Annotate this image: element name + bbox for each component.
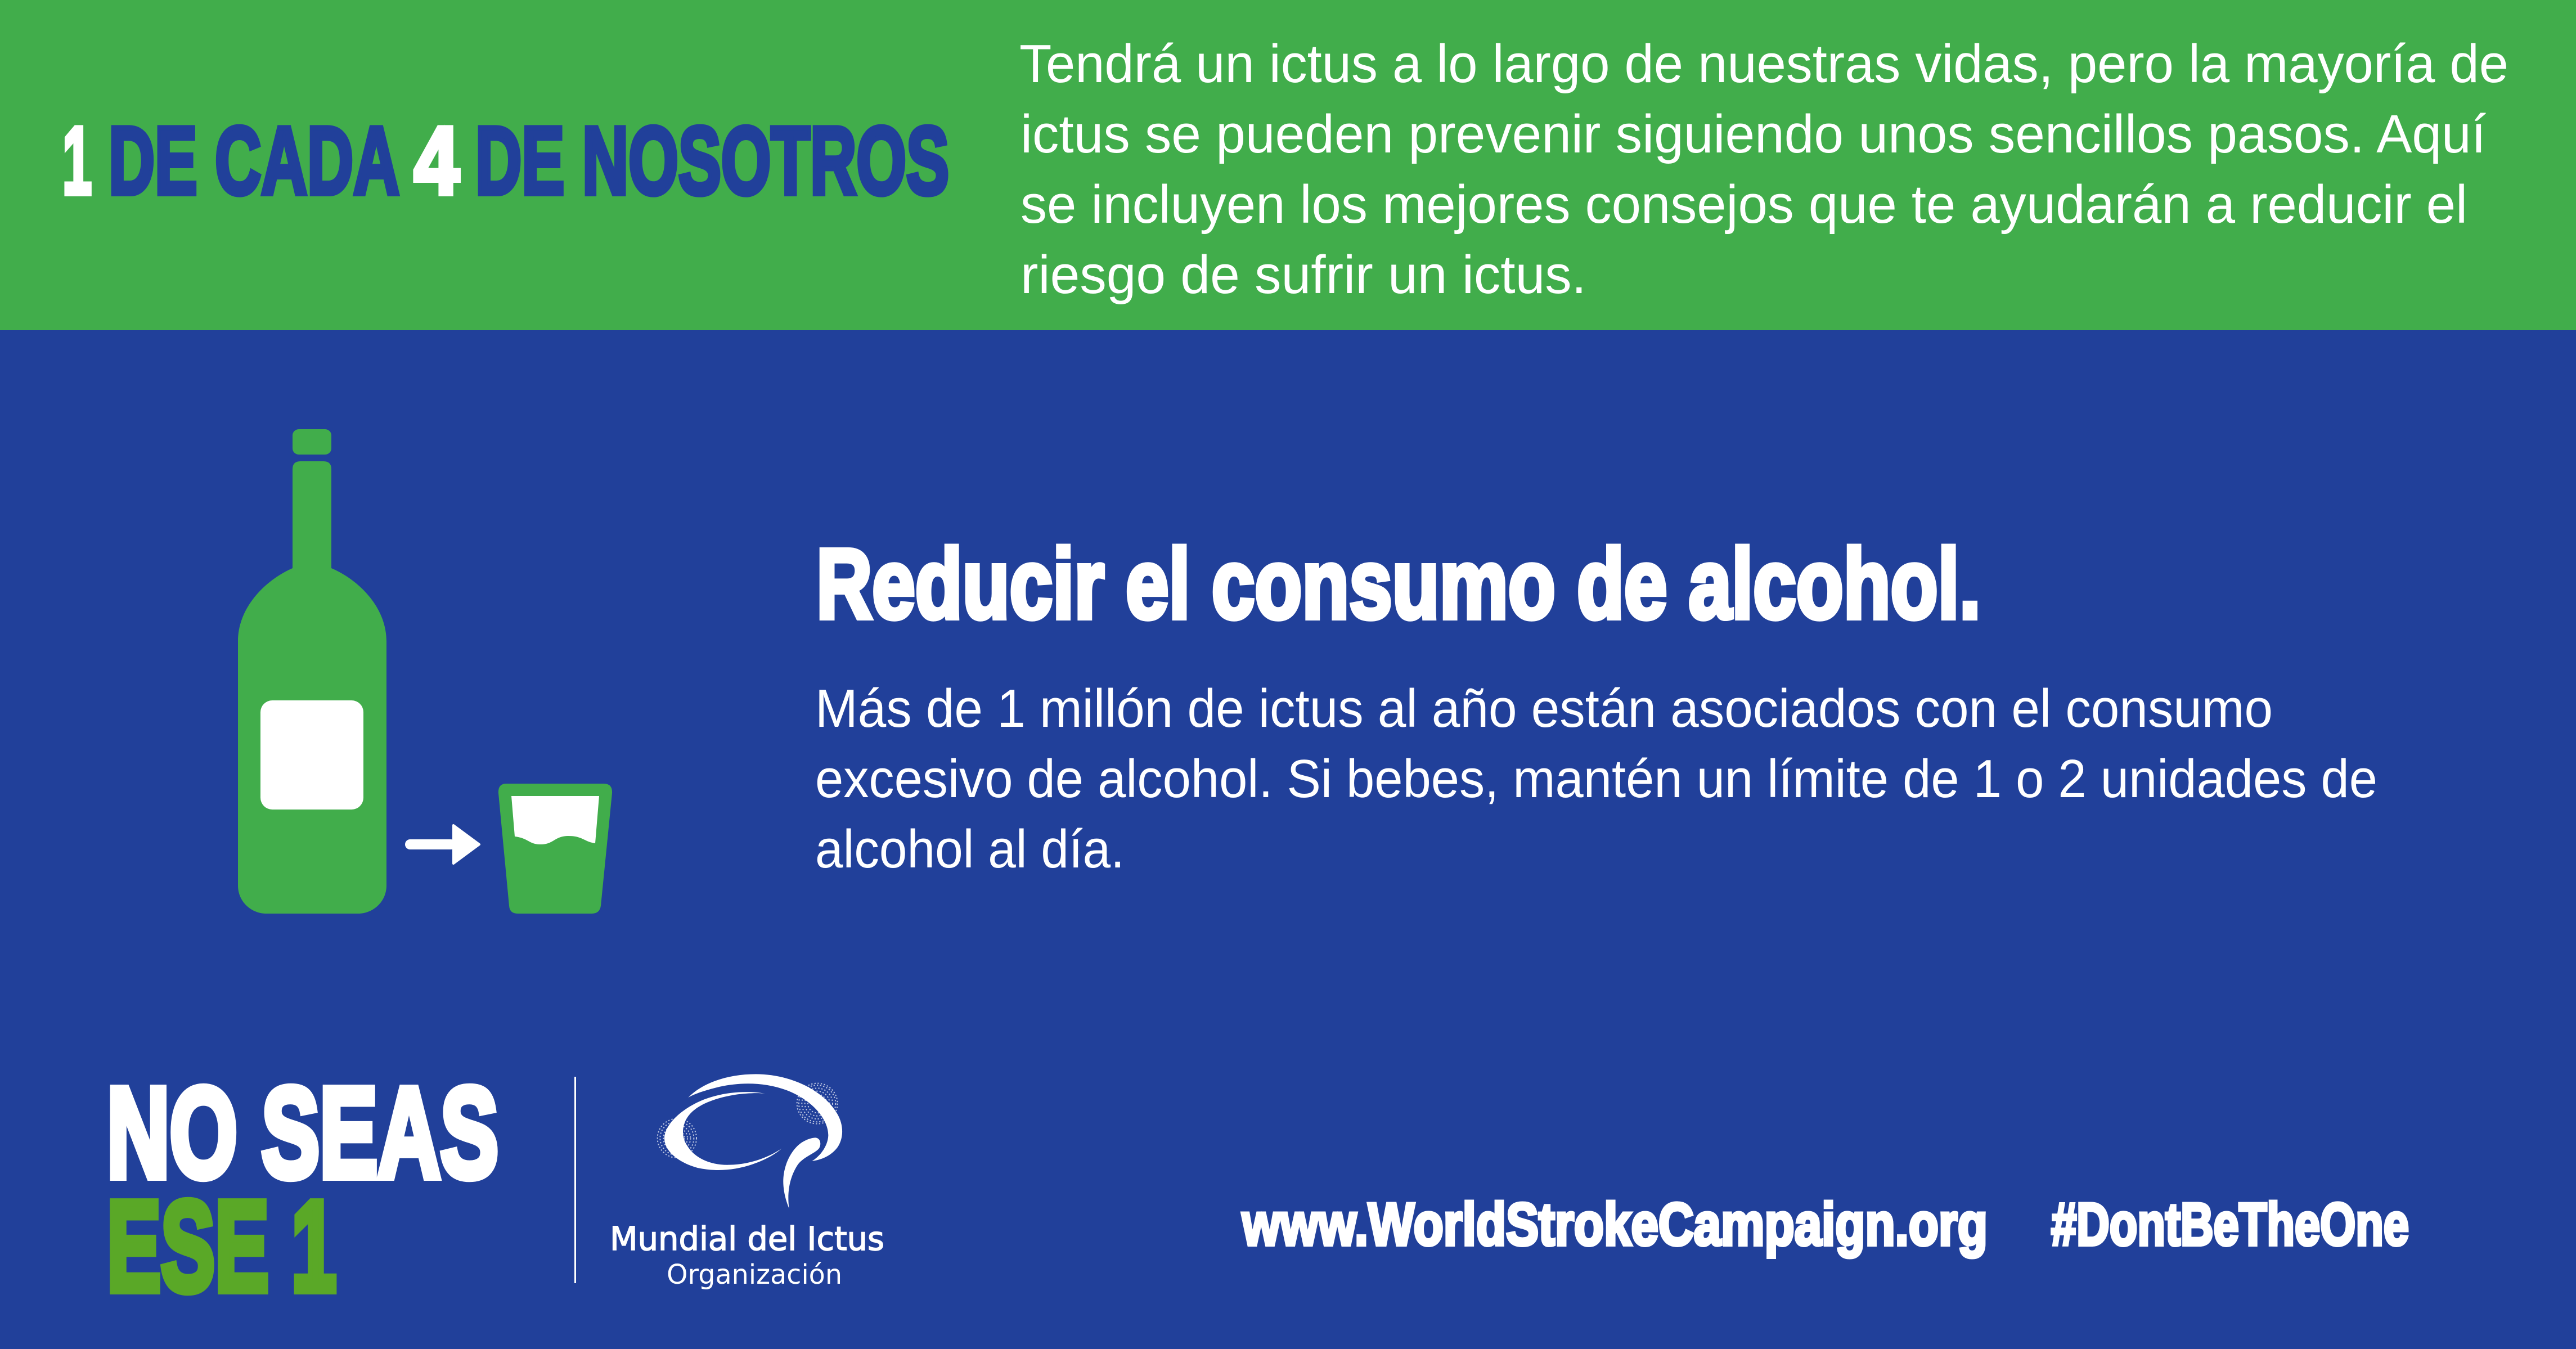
divider line [574,1077,576,1283]
hashtag: #DontBeTheOne [2051,1190,2409,1258]
icon: wine bottle [238,429,386,914]
header title: 1 de cada 4 de nosotros: 1 [62,107,92,215]
body paragraph [815,678,2377,879]
logo text: Organización [667,1259,842,1290]
header intro paragraph [1019,34,2508,305]
body paragraph: excesivo de alcohol. Si bebes, mantén un límite de 1 o 2 unidades de [815,749,2377,809]
header intro paragraph: ictus se pueden prevenir siguiendo unos sencillos pasos. Aquí [1020,104,2486,164]
logo text [610,1220,884,1290]
body paragraph: Más de 1 millón de ictus al año están asociados con el consumo [815,678,2273,739]
arrow: bottle to glass [405,825,479,864]
header intro paragraph: riesgo de sufrir un ictus. [1020,245,1586,305]
body paragraph: alcohol al día. [815,819,1125,879]
heading: reducir el consumo de alcohol: Reducir el consumo de alcohol. [816,529,1981,639]
header title: 1 de cada 4 de nosotros: DE NOSOTROS [475,107,949,215]
website url: www.WorldStrokeCampaign.org [1242,1190,1988,1258]
header intro paragraph: Tendrá un ictus a lo largo de nuestras vidas, pero la mayoría de [1019,34,2508,94]
slogan: no seas ese 1 [107,1062,498,1318]
logo: world stroke organization [610,1074,884,1290]
panel: green header band [0,0,2576,330]
header intro paragraph: se incluyen los mejores consejos que te ayudarán a reducir el [1020,174,2467,235]
header title: 1 de cada 4 de nosotros: DE CADA [109,107,399,215]
header title: 1 de cada 4 de nosotros [62,107,949,215]
slogan: no seas ese 1: ESE 1 [107,1175,336,1318]
header title: 1 de cada 4 de nosotros: 4 [414,107,459,215]
icon: glass [498,784,612,914]
slogan: no seas ese 1: NO SEAS [107,1062,498,1204]
logo mark: brain swoosh [658,1074,842,1208]
logo text: Mundial del Ictus [610,1220,884,1258]
